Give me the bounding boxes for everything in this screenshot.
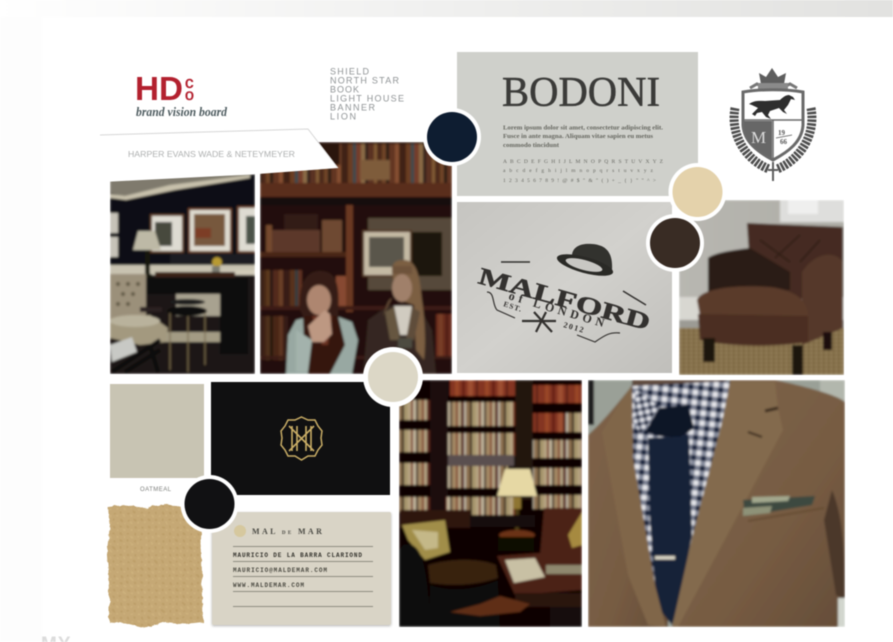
card brand: MAL DE MAR xyxy=(252,527,324,536)
alphabet rows: 1 2 3 4 5 6 7 8 9 ! @ # $ " & " ( ) + _ { } " " ^ > xyxy=(503,177,656,184)
colour swatch: cream xyxy=(668,163,726,221)
lorem paragraph xyxy=(503,126,664,149)
icon: gold monogram xyxy=(281,417,322,460)
panel: Malford of London letterpress logo: EST. xyxy=(502,299,524,314)
card seal xyxy=(234,525,246,537)
lapels xyxy=(619,440,666,627)
typeface name: BODONI xyxy=(502,70,660,116)
symbol word list xyxy=(330,66,404,122)
shield xyxy=(743,90,803,160)
panel: cream business card: MAURICIO@MALDEMAR.COM xyxy=(233,567,327,574)
lorem paragraph: commodo tincidunt xyxy=(503,143,559,149)
icon: equestrian crest: 66 xyxy=(780,138,788,146)
colour swatch: black xyxy=(180,475,238,533)
bowler hat xyxy=(555,244,615,280)
icon: equestrian crest xyxy=(734,68,812,181)
symbol word list: LION xyxy=(330,112,356,122)
photo: two women in library xyxy=(260,142,452,374)
laurel wreath xyxy=(734,108,812,169)
photo: brown leather armchair xyxy=(679,200,844,375)
wordmark: MALFORD xyxy=(475,264,653,336)
cross stem xyxy=(768,162,778,181)
card rules xyxy=(233,546,373,606)
swatch label: OATMEAL xyxy=(140,487,172,493)
tie xyxy=(645,405,694,438)
symbol word list: LIGHT HOUSE xyxy=(330,94,404,104)
left margin strip xyxy=(0,17,42,642)
shirt xyxy=(630,380,728,582)
photo: dark office interior xyxy=(110,174,255,374)
logo: HDco: o xyxy=(185,87,194,104)
white banner with client names xyxy=(100,129,338,182)
panel: Malford of London letterpress logo: 2012 xyxy=(562,320,586,335)
swatch: oatmeal fabric xyxy=(110,384,204,493)
crossed swords and flourishes xyxy=(487,262,646,342)
panel: cream business card xyxy=(212,512,391,625)
symbol word list: BOOK xyxy=(330,84,359,94)
icon: equestrian crest: 19 xyxy=(778,129,786,137)
crown xyxy=(759,68,786,84)
photo: tweed jacket with gingham shirt and navy tie xyxy=(588,380,845,627)
lorem paragraph: Lorem ipsum dolor sit amet, consectetur adipiscing elit. xyxy=(503,126,664,132)
symbol word list: NORTH STAR xyxy=(330,76,400,86)
symbol word list: SHIELD xyxy=(330,66,370,76)
sub-lines: of LONDON xyxy=(507,288,606,330)
top grey band xyxy=(0,0,893,17)
panel: black card with gold monogram xyxy=(211,382,390,495)
horse xyxy=(749,95,795,119)
panel: Bodoni typography specimen xyxy=(457,52,698,196)
crest letter and date: M xyxy=(751,128,766,147)
tagline: brand vision board xyxy=(136,104,227,119)
swatch: torn tan leather xyxy=(107,504,203,628)
banner text: HARPER EVANS WADE & NETEYMEYER xyxy=(128,149,295,159)
panel: cream business card: WWW.MALDEMAR.COM xyxy=(233,582,304,589)
alphabet rows: A B C D E F G H I J L M N O P Q R S T U V X Y Z xyxy=(503,159,664,165)
colour swatch: dark brown xyxy=(646,214,704,272)
pocket square xyxy=(742,495,816,512)
colour swatch: oatmeal xyxy=(363,347,423,407)
photo: library with lamp and leather chair xyxy=(399,380,582,627)
panel: Malford of London letterpress logo xyxy=(457,202,672,373)
lorem paragraph: Fusce in ante magna. Aliquam vitae sapien eu metus xyxy=(503,134,654,140)
symbol word list: BANNER xyxy=(330,102,376,112)
card details: MAURICIO DE LA BARRA CLARIOND xyxy=(233,552,362,559)
alphabet rows: a b c d e f g h i j l m n o p q r s t u v x y z xyxy=(503,167,654,174)
logo: HDco xyxy=(135,70,227,119)
alphabet rows xyxy=(503,159,664,184)
logo: HDco: c xyxy=(185,73,194,92)
logo: HDco: HD xyxy=(135,70,183,107)
colour swatch: navy xyxy=(423,108,481,166)
